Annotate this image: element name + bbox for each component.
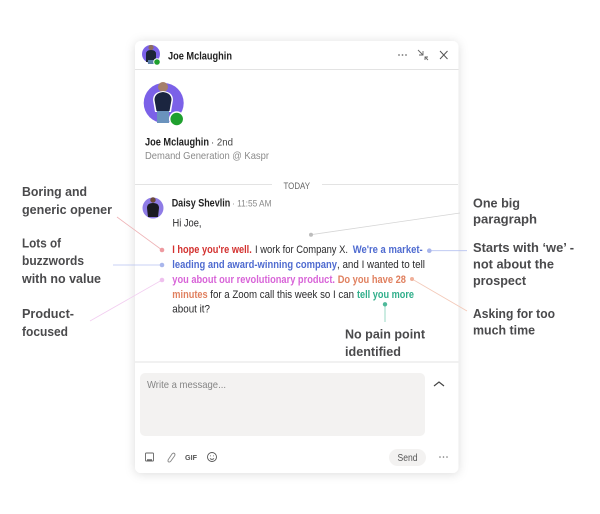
send button bbox=[389, 449, 426, 466]
message body: , and I wanted to tell bbox=[337, 259, 425, 271]
annotation: too much time: much time bbox=[473, 322, 535, 338]
panel: profile summary bbox=[144, 82, 269, 162]
annotation: one big paragraph bbox=[309, 196, 537, 237]
message body: minutes bbox=[172, 289, 208, 301]
icon: gif: GIF bbox=[185, 455, 198, 462]
message body: you about our revolutionary product. bbox=[172, 274, 335, 286]
annotation: buzzwords bbox=[21, 236, 164, 286]
annotation: product-focused: focused bbox=[22, 324, 68, 339]
date divider: TODAY bbox=[284, 181, 310, 191]
annotation: boring opener: generic opener bbox=[22, 202, 112, 217]
annotation: too much time: Asking for too bbox=[473, 306, 555, 321]
annotation: no pain point: identified bbox=[345, 344, 401, 359]
annotation: too much time bbox=[410, 277, 555, 338]
message body bbox=[172, 218, 425, 316]
icon: expand chevron bbox=[434, 382, 444, 386]
icon: image bbox=[146, 453, 154, 461]
panel: message composer bbox=[140, 373, 448, 466]
panel: header bar bbox=[142, 45, 448, 65]
message body: about it? bbox=[172, 304, 210, 316]
icon: composer options bbox=[439, 456, 448, 458]
message input: Write a message... bbox=[147, 379, 226, 391]
annotation: no pain point bbox=[345, 302, 426, 359]
icon: large profile avatar bbox=[144, 82, 184, 126]
sender name and time: Daisy Shevlin bbox=[172, 198, 230, 210]
icon: more options bbox=[398, 54, 407, 56]
message body: Hi Joe, bbox=[172, 218, 202, 230]
annotation: buzzwords: buzzwords bbox=[22, 253, 84, 268]
message body: leading and award-winning company bbox=[172, 259, 337, 271]
annotation: starts with we: prospect bbox=[473, 273, 527, 288]
icon: sender avatar bbox=[142, 197, 164, 218]
icon: close bbox=[440, 51, 448, 59]
annotation: no pain point: No pain point bbox=[345, 326, 426, 342]
message body: tell you more bbox=[357, 289, 414, 301]
annotation: one big paragraph: One big bbox=[473, 196, 520, 210]
icon: collapse arrows bbox=[418, 50, 428, 60]
profile name: Joe Mclaughin bbox=[145, 136, 209, 148]
message body: I hope you're well. bbox=[172, 244, 252, 256]
message input bbox=[140, 373, 425, 436]
connection degree: · 2nd bbox=[211, 136, 233, 148]
annotation: product-focused: Product- bbox=[22, 306, 74, 321]
message body: I work for Company X. bbox=[255, 244, 348, 256]
annotation: starts with we bbox=[427, 240, 574, 288]
message body: Do you have 28 bbox=[338, 274, 406, 286]
annotation: starts with we: not about the bbox=[473, 256, 554, 272]
annotation: boring opener bbox=[22, 184, 164, 252]
panel: chat window bbox=[135, 41, 458, 473]
sender name and time: · 11:55 AM bbox=[232, 198, 272, 208]
message body: for a Zoom call this week so I can bbox=[210, 289, 354, 301]
job title: Demand Generation @ Kaspr bbox=[145, 150, 269, 162]
message body: We're a market- bbox=[353, 244, 423, 256]
icon: attachment bbox=[168, 453, 175, 462]
annotation: starts with we: Starts with ‘we’ - bbox=[473, 240, 574, 255]
icon: emoji bbox=[208, 452, 216, 462]
annotation: product-focused bbox=[22, 278, 164, 339]
annotation: boring opener: Boring and bbox=[22, 184, 87, 199]
annotation: one big paragraph: paragraph bbox=[473, 212, 537, 226]
annotation: buzzwords: Lots of bbox=[22, 236, 62, 250]
icon: small profile avatar bbox=[142, 45, 160, 65]
send button: Send bbox=[398, 453, 418, 464]
header name: Joe Mclaughin bbox=[168, 50, 232, 62]
annotation: buzzwords: with no value bbox=[21, 271, 101, 286]
